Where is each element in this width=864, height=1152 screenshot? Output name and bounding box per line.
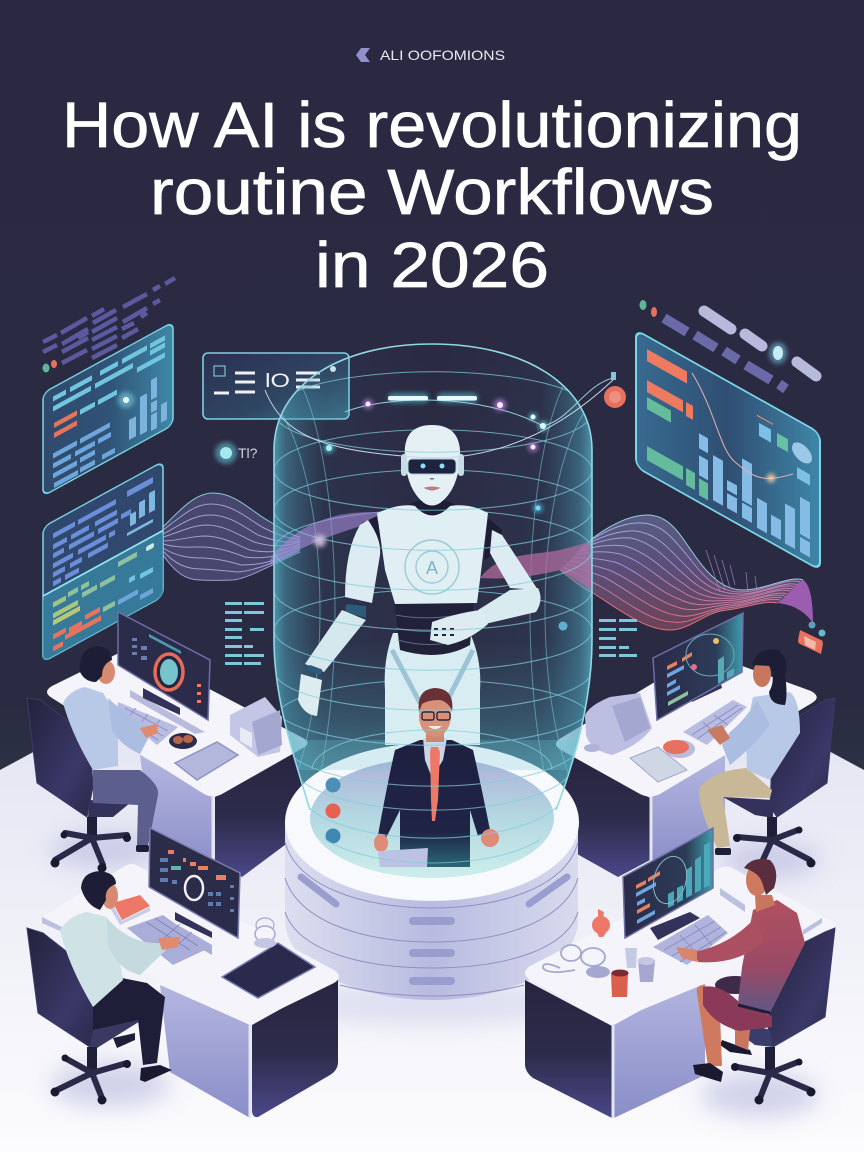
card dot [330,366,336,372]
waist [394,600,474,655]
torso [377,505,488,604]
person: front left [60,871,180,1082]
shoe [140,1065,172,1082]
right hand [430,610,488,645]
teal bar chart [668,842,710,908]
screen ui [149,634,181,654]
divider [43,529,163,597]
pink flask [592,916,610,934]
strip [720,888,745,912]
far leg and shoe [720,1040,752,1055]
book [113,895,150,920]
glass [256,918,274,932]
leg grooves [392,650,473,703]
screen [623,828,713,938]
desk top [42,864,339,1022]
panel: left upper dashboard [43,322,173,496]
hair [81,871,116,910]
side panel [140,755,213,872]
visor [408,459,456,474]
legs [385,633,480,745]
hologram outline [274,344,592,810]
wave band behind robot [270,512,592,590]
desk top [556,654,817,796]
tablet [175,742,238,780]
chart bars [127,490,155,536]
hand [676,947,697,962]
cup [625,948,637,968]
drawer handles [409,917,455,985]
right forearm [478,588,541,624]
status dots right [640,300,657,317]
top right chips [757,415,812,487]
robot: A [426,558,438,578]
hologram tint over disc [294,740,572,770]
list bars right [599,619,637,657]
status dots left [42,360,57,372]
trousers [699,768,772,848]
person: back left [63,646,158,852]
panel: small central card [203,353,349,419]
orbit [648,853,692,907]
well [310,758,554,878]
desk: front left [42,864,339,1118]
ring items [543,945,605,972]
panel: right chart dashboard [636,330,820,570]
tie [430,747,440,821]
hair [744,859,776,895]
keyboard [127,915,209,965]
monitor: front left [149,828,240,955]
green bars [647,397,708,500]
list bars left [225,602,264,665]
screen [653,613,743,720]
monitor: back right [653,613,743,720]
glyphs: lO [265,371,290,392]
top right code pills [664,311,816,389]
title: in 2026 [315,229,549,301]
right upper arm [490,530,538,590]
tablet [630,747,687,782]
ears [401,454,464,476]
coral badge [798,630,823,654]
tumbler [638,960,655,982]
left forearm [305,610,366,672]
chair: back right [723,698,835,868]
left wrist [307,665,323,675]
person: front right [676,859,805,1082]
platform stack [285,743,579,1000]
wave tail nodes [808,622,826,636]
cream chip [146,542,154,552]
glasses [422,712,450,720]
left hand [298,674,322,716]
upper text bars [53,477,153,587]
nose [430,478,434,480]
shirt [423,738,447,778]
arm [722,700,770,765]
desk top [525,866,835,1020]
keyboard [683,700,747,745]
left upper arm [345,520,380,603]
text bars cyan [53,335,165,430]
face [97,660,115,684]
dark panel [525,980,612,1118]
shirt [738,900,805,1013]
back wave fan [706,550,757,592]
seat cushion [715,976,755,994]
arm [107,918,166,975]
right shoulder joint [484,518,502,560]
wave tail droop [777,580,813,623]
stand [650,912,700,940]
printer device [585,693,652,755]
icon square [214,366,225,376]
shirt [63,687,118,770]
notebook [222,943,315,998]
head [405,425,460,506]
shorts [703,986,772,1031]
title [62,89,802,301]
desk items right back [584,693,747,782]
desk items front left [42,895,315,998]
chair: front left [27,928,153,1104]
hair [752,649,786,705]
title: How AI is revolutionizing [62,89,802,161]
desk: back right [556,654,817,877]
face [419,695,451,737]
target ring [155,654,183,690]
hair [419,688,452,712]
right hand [481,829,499,847]
code bars [667,652,692,670]
arm [694,918,765,962]
side panel [160,985,250,1118]
neck [755,895,775,912]
dish [169,733,197,749]
text bars blue [53,420,115,489]
leg [697,985,722,1066]
neck [404,499,460,525]
strip [42,917,62,932]
side panel [614,975,705,1118]
man in suit [374,688,499,867]
drawer body [285,820,578,1000]
stand [690,680,722,702]
glow dot panel [118,392,134,408]
title: routine Workflows [150,156,714,228]
meridians [282,386,584,774]
eyes [420,464,444,468]
ui chips [168,850,226,880]
desk items left back [117,697,282,780]
ring [185,876,203,900]
desk top [47,649,308,796]
glow node with label: Tl? [238,445,258,461]
eyebrow label [356,47,505,63]
coral bars [647,349,693,420]
coral bars [54,410,77,438]
blue bar chart [699,433,810,557]
hologram front rings [274,412,592,863]
trousers [93,978,165,1065]
floor [0,716,864,1152]
trousers [93,770,158,846]
shoe [715,848,731,855]
desk: back left [47,649,308,877]
neck [426,730,444,742]
icon: chevron [356,48,370,62]
floor shadows [50,832,820,1117]
code bars [636,871,660,914]
side panel [652,755,725,868]
monitor: front right [623,828,713,940]
left wave mesh [163,493,300,580]
robot [298,425,541,745]
shoe [693,1063,723,1082]
floating code dashes: upper left [43,278,175,363]
stand [130,690,205,734]
stand [168,922,212,955]
status spheres [326,778,340,844]
red mug [611,973,628,997]
person: back right [699,649,800,855]
chair: back left [27,698,131,872]
eyebrow text: ALI OOFOMIONS [380,47,505,63]
lower green bars [53,552,137,640]
mini bar chart [129,371,167,443]
drawer seams [285,842,578,996]
suit [378,740,490,867]
dark panel [252,977,338,1117]
arm [108,698,151,754]
face [102,883,118,909]
top disc [285,743,579,901]
list lines [214,373,320,393]
smile [428,726,442,729]
waistband [738,1005,770,1013]
keyboard [653,915,728,965]
light bars [388,393,478,403]
keyboard [117,702,178,745]
data arcs and connectors [265,378,613,458]
face [753,661,771,687]
coral mouse [665,740,695,758]
hologram body [274,366,592,787]
left shoulder joint [362,516,382,555]
desk: front right [525,866,835,1118]
printer device [230,697,282,757]
right wave mesh [560,515,803,630]
dark panel [215,745,305,877]
coral node [604,372,626,408]
screen [149,828,240,938]
arc nodes [324,399,568,630]
desk items front right [543,888,822,997]
shirt [60,912,123,1007]
chair: front right [710,928,835,1104]
orbit ring [686,634,734,676]
mouth [425,487,439,490]
left elbow cuff [345,604,366,618]
glow oval [769,342,787,364]
hand [158,937,180,950]
paper [378,848,428,867]
shoe [136,845,149,852]
far shoe [113,1033,135,1048]
lower blue bars [118,565,153,612]
fingers [434,628,454,636]
monitor: back left [118,612,210,734]
left hand [374,834,388,852]
panel: left lower dashboard [43,461,163,662]
screen [118,612,210,720]
shirt [747,692,800,780]
chest emblem [405,540,459,594]
trend line [692,373,793,482]
hand [707,725,730,745]
glow node with label [215,442,258,464]
face [746,864,768,896]
hair [80,646,112,682]
lower coral bars [53,606,101,652]
back arcs [274,372,592,720]
dark panel [563,750,650,877]
